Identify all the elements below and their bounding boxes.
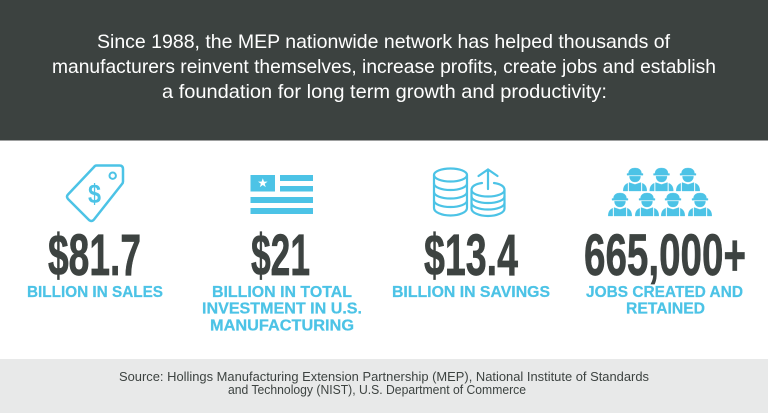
label: billion in total investment: BILLION IN TOTAL [212, 284, 352, 301]
label: jobs created and retained: RETAINED [626, 301, 705, 318]
panel: savings stat [392, 168, 550, 301]
source text: and Technology (NIST), U.S. Department of Commerce [228, 382, 526, 397]
header band [0, 0, 768, 140]
label: billion in total investment: INVESTMENT IN U.S. [202, 301, 362, 318]
icon: flag [250, 175, 313, 214]
icon: coin stacks with arrow [434, 168, 504, 216]
panel: investment stat [202, 175, 362, 334]
label: billion in total investment: MANUFACTURING [210, 317, 354, 334]
intro text [52, 31, 716, 103]
stat number: $81.7: $81.7 [48, 223, 141, 288]
icon: group of workers [608, 168, 712, 216]
source text [119, 369, 649, 397]
panel: jobs stat [584, 168, 746, 318]
label: billion in total investment [202, 284, 362, 334]
label: billion in sales: BILLION IN SALES [27, 284, 163, 301]
icon: price tag: $ [88, 179, 101, 209]
footer band [0, 359, 768, 413]
label: jobs created and retained [586, 284, 743, 318]
intro text: Since 1988, the MEP nationwide network has helped thousands of [97, 31, 671, 53]
intro text: manufacturers reinvent themselves, increase profits, create jobs and establish [52, 56, 716, 78]
source text: Source: Hollings Manufacturing Extension Partnership (MEP), National Institute of Standards [119, 369, 649, 384]
panel: sales stat [27, 166, 163, 301]
stat number: $13.4: $13.4 [424, 223, 518, 288]
label: billion in savings: BILLION IN SAVINGS [392, 284, 550, 301]
intro text: a foundation for long term growth and productivity: [162, 81, 607, 103]
stat number: $21: $21 [251, 223, 310, 288]
label: jobs created and retained: JOBS CREATED AND [586, 284, 743, 301]
